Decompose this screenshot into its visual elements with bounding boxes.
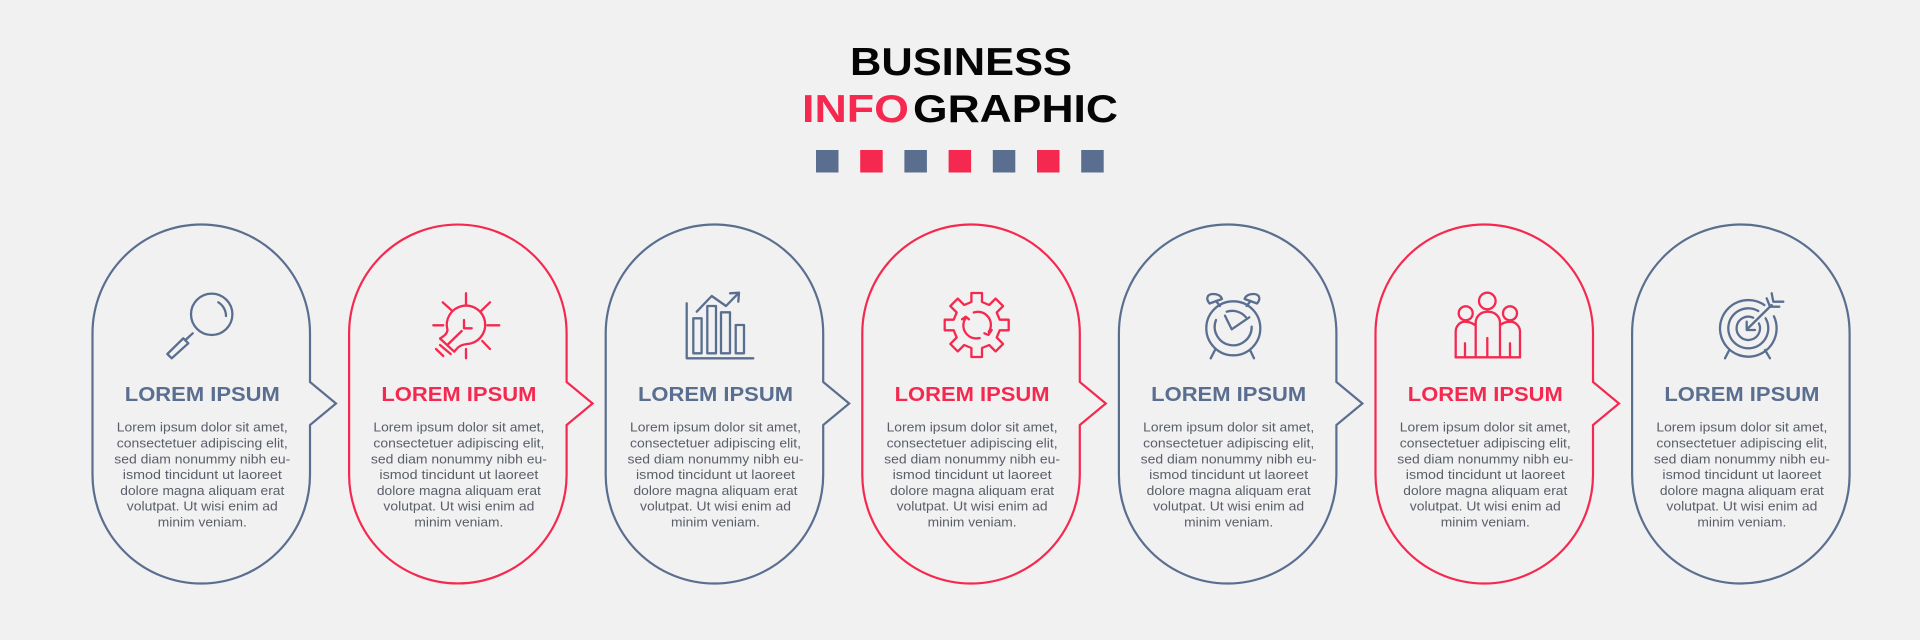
panel: step 6 bbox=[1376, 224, 1619, 584]
body text: minim veniam. bbox=[414, 516, 503, 530]
body text: Lorem ipsum dolor sit amet, bbox=[373, 421, 544, 435]
icon: magnifying glass bbox=[167, 294, 232, 358]
body text: sed diam nonummy nibh eu- bbox=[1141, 452, 1317, 466]
body text: minim veniam. bbox=[671, 516, 760, 530]
body text: Lorem ipsum dolor sit amet, bbox=[630, 421, 801, 435]
body text: volutpat. Ut wisi enim ad bbox=[383, 500, 534, 514]
body text bbox=[628, 421, 804, 530]
card outline with arrow bbox=[1119, 224, 1362, 584]
body text: minim veniam. bbox=[1441, 516, 1530, 530]
body text: dolore magna aliquam erat bbox=[1403, 484, 1568, 498]
panel: step 5 bbox=[1119, 224, 1362, 584]
body text bbox=[1654, 421, 1830, 530]
body text: consectetuer adipiscing elit, bbox=[630, 436, 801, 450]
icon: bar chart with trend arrow bbox=[687, 293, 753, 358]
body text: volutpat. Ut wisi enim ad bbox=[1410, 500, 1561, 514]
panel: step 4 bbox=[862, 224, 1106, 583]
card outline with arrow bbox=[1376, 224, 1619, 584]
body text: volutpat. Ut wisi enim ad bbox=[1666, 500, 1817, 514]
body text: sed diam nonummy nibh eu- bbox=[114, 452, 290, 466]
body text: dolore magna aliquam erat bbox=[634, 484, 798, 498]
body text: dolore magna aliquam erat bbox=[120, 484, 285, 498]
body text: ismod tincidunt ut laoreet bbox=[1149, 468, 1309, 482]
body text: minim veniam. bbox=[1184, 516, 1273, 530]
heading: LOREM IPSUM bbox=[895, 384, 1050, 406]
body text: ismod tincidunt ut laoreet bbox=[123, 468, 282, 482]
icon: three people bbox=[1456, 293, 1520, 357]
icon: light bulb with clock bbox=[433, 293, 499, 358]
panel: step 7 bbox=[1632, 224, 1850, 584]
body text bbox=[1397, 421, 1573, 530]
body text: ismod tincidunt ut laoreet bbox=[1406, 468, 1565, 482]
body text: consectetuer adipiscing elit, bbox=[373, 436, 544, 450]
body text: volutpat. Ut wisi enim ad bbox=[640, 500, 791, 514]
icon: alarm clock bbox=[1206, 294, 1260, 358]
title: INFO bbox=[802, 88, 909, 131]
panel: step 2 bbox=[349, 225, 593, 583]
card outline with arrow bbox=[862, 224, 1106, 583]
body text: Lorem ipsum dolor sit amet, bbox=[887, 421, 1058, 435]
body text: volutpat. Ut wisi enim ad bbox=[1153, 500, 1304, 514]
card outline without arrow bbox=[1632, 224, 1850, 584]
title: GRAPHIC bbox=[913, 88, 1118, 131]
body text bbox=[884, 421, 1060, 530]
card outline with arrow bbox=[349, 225, 593, 583]
icon: target with arrow bbox=[1720, 293, 1783, 358]
body text: dolore magna aliquam erat bbox=[377, 484, 541, 498]
heading: LOREM IPSUM bbox=[1151, 384, 1306, 406]
heading: LOREM IPSUM bbox=[1408, 384, 1563, 406]
body text: volutpat. Ut wisi enim ad bbox=[897, 500, 1048, 514]
body text: sed diam nonummy nibh eu- bbox=[628, 452, 804, 466]
body text: consectetuer adipiscing elit, bbox=[117, 436, 288, 450]
icon: gear with refresh arrows bbox=[945, 293, 1009, 357]
body text: sed diam nonummy nibh eu- bbox=[371, 452, 547, 466]
body text: minim veniam. bbox=[158, 516, 247, 530]
body text: volutpat. Ut wisi enim ad bbox=[127, 500, 278, 514]
panel: step 3 bbox=[606, 224, 849, 584]
decorative squares row bbox=[816, 150, 1104, 172]
body text bbox=[114, 421, 290, 530]
body text: ismod tincidunt ut laoreet bbox=[636, 468, 796, 482]
body text: dolore magna aliquam erat bbox=[890, 484, 1055, 498]
body text: ismod tincidunt ut laoreet bbox=[1662, 468, 1822, 482]
body text: sed diam nonummy nibh eu- bbox=[884, 452, 1060, 466]
body text: consectetuer adipiscing elit, bbox=[1143, 436, 1314, 450]
body text: dolore magna aliquam erat bbox=[1147, 484, 1311, 498]
heading: LOREM IPSUM bbox=[638, 384, 793, 406]
body text: Lorem ipsum dolor sit amet, bbox=[1400, 421, 1571, 435]
body text: sed diam nonummy nibh eu- bbox=[1397, 452, 1573, 466]
body text: dolore magna aliquam erat bbox=[1660, 484, 1824, 498]
panel: step 1 bbox=[92, 224, 336, 584]
heading: LOREM IPSUM bbox=[381, 384, 536, 406]
body text: minim veniam. bbox=[1697, 516, 1786, 530]
body text: Lorem ipsum dolor sit amet, bbox=[1656, 421, 1827, 435]
card outline with arrow bbox=[606, 224, 849, 584]
title bbox=[802, 41, 1118, 131]
body text: minim veniam. bbox=[928, 516, 1017, 530]
heading: LOREM IPSUM bbox=[1664, 384, 1819, 406]
body text: Lorem ipsum dolor sit amet, bbox=[1143, 421, 1314, 435]
card outline with arrow bbox=[92, 224, 336, 584]
body text: Lorem ipsum dolor sit amet, bbox=[117, 421, 288, 435]
body text: ismod tincidunt ut laoreet bbox=[379, 468, 539, 482]
body text: consectetuer adipiscing elit, bbox=[887, 436, 1058, 450]
body text: ismod tincidunt ut laoreet bbox=[893, 468, 1052, 482]
body text: consectetuer adipiscing elit, bbox=[1400, 436, 1571, 450]
body text bbox=[371, 421, 547, 530]
title: BUSINESS bbox=[850, 41, 1072, 84]
heading: LOREM IPSUM bbox=[125, 384, 280, 406]
body text: sed diam nonummy nibh eu- bbox=[1654, 452, 1830, 466]
body text: consectetuer adipiscing elit, bbox=[1656, 436, 1827, 450]
body text bbox=[1141, 421, 1317, 530]
